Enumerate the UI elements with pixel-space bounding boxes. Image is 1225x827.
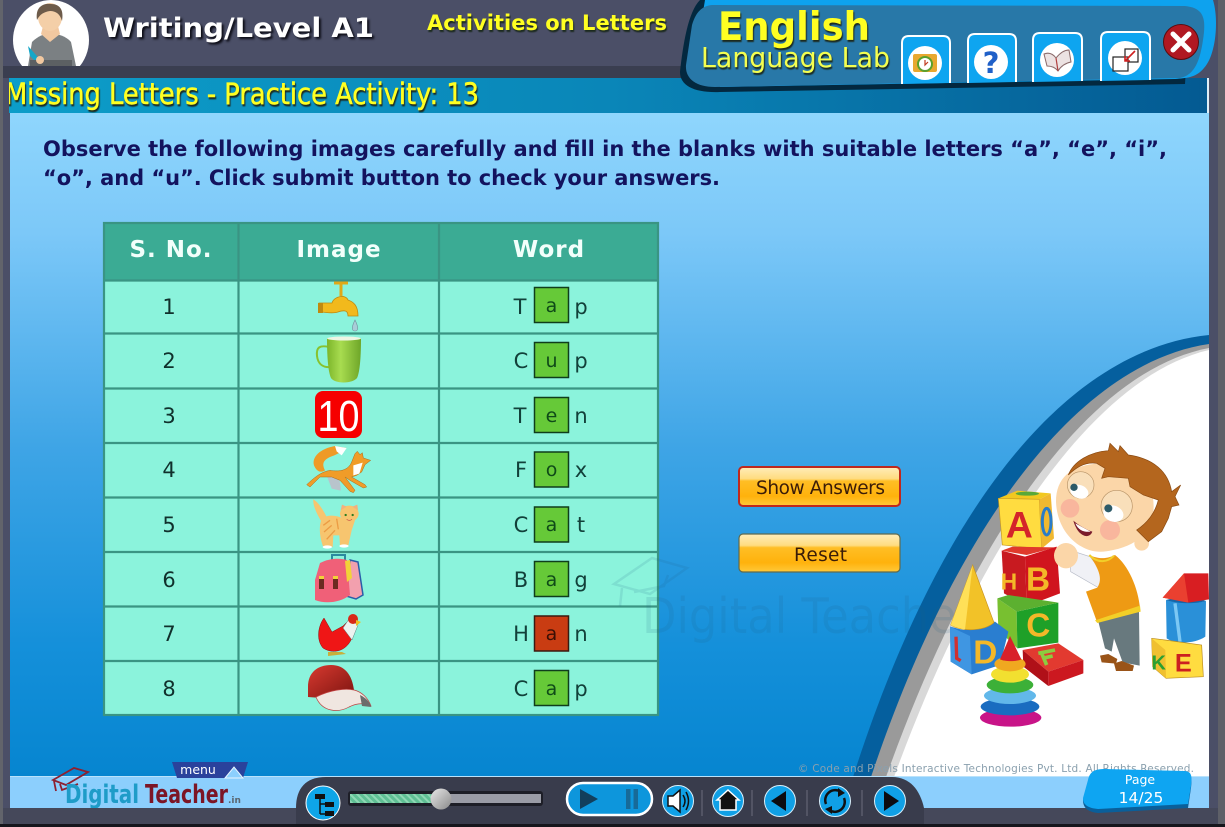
main content panel: [10, 113, 1209, 777]
button: tree menu: [306, 786, 340, 820]
practice activity heading: Missing Letters - Practice Activity: 13: [5, 77, 479, 111]
boy shirt: [1086, 555, 1140, 621]
menu tab: menu: [180, 762, 216, 777]
icon tab: resize: [1101, 32, 1150, 81]
serial numbers: 6: [162, 568, 176, 592]
word: Bag: [514, 562, 588, 596]
footer strip: [10, 776, 1209, 808]
table header: S. No.: [129, 237, 213, 263]
page badge: [1083, 769, 1191, 813]
word: Cat: C: [514, 513, 528, 537]
serial numbers: 1: [162, 295, 176, 319]
word: Han, marked wrong: a: [546, 623, 557, 645]
word: Tap: a: [546, 295, 557, 317]
icon: close button: [1164, 24, 1198, 60]
word: Fox: x: [575, 458, 587, 482]
eyes: [1067, 472, 1132, 525]
watermark: [614, 558, 976, 645]
serial numbers: 5: [162, 513, 176, 537]
boy legs and shoes: [1098, 612, 1140, 671]
word: Cap: [514, 670, 588, 706]
watermark: Digital Teacher: [642, 588, 976, 645]
stacking ring toy: [980, 636, 1041, 727]
toy blocks: [950, 491, 1209, 727]
control bar: [296, 777, 924, 824]
avatar: writing student: [13, 0, 89, 66]
English Language Lab panel: [680, 0, 1216, 92]
menu tab: [172, 762, 248, 778]
instructions: “o”, and “u”. Click submit button to check your answers.: [43, 166, 720, 190]
icon: number ten: 10: [318, 392, 360, 441]
word rows: [513, 288, 588, 706]
copyright: © Code and Pixels Interactive Technologies Pvt. Ltd. All Rights Reserved.: [798, 763, 1194, 775]
table header: Word: [513, 237, 585, 263]
word: Cap: C: [514, 677, 528, 701]
icon tab: help: ?: [983, 46, 999, 80]
blocks at right: K: [1151, 652, 1166, 674]
cone and block D: D: [973, 634, 997, 671]
button: previous: [764, 786, 796, 816]
word: Cup: u: [545, 350, 558, 372]
play and pause pill: [567, 783, 652, 815]
icon: hen: [319, 614, 361, 656]
boy hands: [1054, 543, 1078, 568]
block A: A: [1006, 503, 1033, 545]
word: Tap: p: [574, 295, 588, 319]
blocks at right: [1151, 573, 1209, 678]
table: missing letters: [103, 222, 659, 716]
block C: [997, 595, 1058, 648]
illustration: boy with alphabet blocks: [950, 443, 1209, 727]
logo: Digital Teacher: [53, 768, 241, 810]
word: Ten: T: [513, 404, 527, 428]
word: Ten: e: [546, 405, 557, 427]
page badge: 14/25: [1119, 789, 1163, 807]
block B: B: [1026, 562, 1050, 599]
word: Bag: g: [574, 568, 588, 592]
serial numbers: 3: [162, 404, 176, 428]
block B: [1001, 547, 1060, 606]
icon: cup: [317, 336, 361, 382]
word: Cup: C: [514, 349, 528, 373]
word: Tap: T: [513, 295, 527, 319]
table header: Image: [296, 237, 382, 263]
icon tab: clock folder: [902, 36, 950, 84]
word: Cap: a: [546, 678, 557, 700]
button: reset: Reset: [794, 545, 847, 566]
serial numbers: [162, 295, 176, 701]
icon: graduation cap: [53, 768, 88, 791]
logo word: Digital: Digital: [65, 780, 139, 810]
mouth: [1073, 521, 1092, 536]
instructions: Observe the following images carefully and fill in the blanks with suitable letters “a”, “e”, “i”,: [43, 137, 1167, 161]
bottom strip: [3, 808, 1218, 824]
instructions: [43, 137, 1167, 190]
button: home: [712, 786, 744, 816]
block C: C: [1026, 608, 1050, 645]
icon: tap: [318, 283, 358, 331]
word: Han, marked wrong: n: [574, 622, 588, 646]
serial numbers: 7: [162, 622, 176, 646]
word: Cap: p: [574, 677, 588, 701]
word: Fox: o: [546, 459, 557, 481]
icon: cap: [308, 665, 371, 710]
word: Fox: F: [515, 458, 527, 482]
icon: cat: [313, 499, 359, 549]
word: Ten: n: [574, 404, 588, 428]
word: Cat: t: [577, 513, 585, 537]
boy sleeve: [1069, 550, 1103, 588]
button: refresh: [820, 786, 850, 816]
table header: [129, 237, 585, 263]
header subtitle: Activities on Letters: [427, 11, 667, 35]
cone and block D: [950, 565, 1008, 674]
block B: H: [1001, 568, 1017, 594]
icon: school bag: [315, 555, 363, 602]
blocks at right: E: [1175, 650, 1192, 678]
logo suffix: .in: [228, 796, 241, 806]
icon tab: book: [1033, 33, 1082, 82]
word: Cat: [514, 507, 585, 542]
logo word: Teacher: Teacher: [145, 780, 228, 810]
white corner panel with curved band: [853, 335, 1209, 777]
word: Bag: B: [514, 568, 528, 592]
boy figure: [1054, 443, 1181, 671]
icon tab: help: [968, 34, 1016, 83]
Language Lab subheading: Language Lab: [701, 41, 890, 74]
button: show answers: Show Answers: [756, 478, 885, 499]
word: Han, marked wrong: [513, 616, 588, 651]
word: Ten: [513, 398, 588, 432]
word: Fox: [515, 452, 587, 487]
title bar: [5, 77, 1209, 113]
word: Bag: a: [546, 569, 557, 591]
button: show answers: [739, 467, 900, 506]
serial numbers: 4: [162, 458, 176, 482]
hair: [1068, 443, 1181, 542]
English heading: English: [718, 5, 870, 50]
word: Cup: [514, 342, 588, 378]
icon: fox: [307, 446, 371, 493]
boy head: [1056, 443, 1181, 552]
word: Cat: a: [546, 514, 557, 536]
progress slider: [348, 788, 543, 810]
word: Cup: p: [574, 349, 588, 373]
button: reset: [739, 534, 900, 572]
word: Han, marked wrong: H: [513, 622, 529, 646]
block A: [998, 491, 1054, 549]
block F: [1023, 643, 1083, 686]
word: Tap: [513, 288, 588, 322]
button: next: [874, 786, 906, 816]
page badge: Page: [1125, 772, 1155, 787]
serial numbers: 8: [162, 677, 176, 701]
serial numbers: 2: [162, 349, 176, 373]
button: sound: [662, 786, 694, 816]
header title: Writing/Level A1: [103, 13, 374, 44]
